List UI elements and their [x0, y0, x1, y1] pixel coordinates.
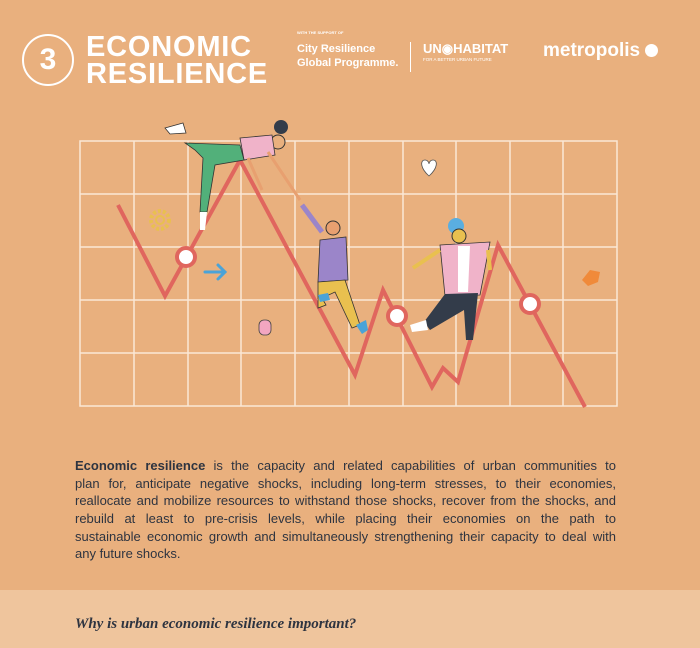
- title: ECONOMIC: [86, 31, 252, 63]
- person: woman lying on peak: [165, 120, 300, 230]
- definition text: any future shocks.: [75, 546, 180, 561]
- definition text: sustainable economic growth and simultaneously strengthening their capacity to deal with: [75, 529, 616, 544]
- title: RESILIENCE: [86, 58, 268, 90]
- icon: gear: [151, 211, 169, 229]
- logo: City Resilience: Global Programme.: [297, 57, 398, 69]
- logo: City Resilience: City Resilience: [297, 43, 375, 55]
- icon: arrow: [205, 265, 225, 279]
- question heading: Why is urban economic resilience important?: [75, 616, 356, 632]
- trend line: [118, 160, 585, 407]
- logo: metropolis: metropolis: [543, 40, 640, 61]
- header: [22, 30, 658, 90]
- support label: WITH THE SUPPORT OF: [297, 30, 343, 35]
- definition text: rebuild at least to pre-crisis levels, while placing their economies on the path to: [75, 511, 616, 526]
- bottom band: [0, 590, 700, 648]
- logo: City Resilience: [297, 43, 398, 69]
- title: [86, 31, 268, 90]
- person: man in pink shirt: [410, 218, 490, 340]
- chart illustration: [79, 120, 618, 408]
- definition text: [75, 458, 616, 561]
- logo: UN-Habitat: FOR A BETTER URBAN FUTURE: [423, 57, 492, 62]
- definition text: plan for, anticipate negative shocks, including long-term stresses, to their economies,: [75, 476, 616, 491]
- grid: [80, 141, 617, 406]
- icon: heart: [422, 160, 436, 176]
- definition text: Economic resilience is the capacity and related capabilities of urban communities to: [75, 458, 616, 473]
- logo: UN-Habitat: [410, 42, 520, 72]
- definition text: reallocate and mobilize resources to withstand those shocks, recover from the shocks, and: [75, 493, 616, 508]
- number badge: [22, 34, 74, 86]
- logo: UN-Habitat: UN◉HABITAT: [423, 41, 508, 56]
- icon: pointing hand: [582, 270, 600, 286]
- person: climber in purple hoodie: [302, 205, 368, 334]
- icon: hand: [259, 320, 271, 335]
- number badge: 3: [40, 43, 56, 76]
